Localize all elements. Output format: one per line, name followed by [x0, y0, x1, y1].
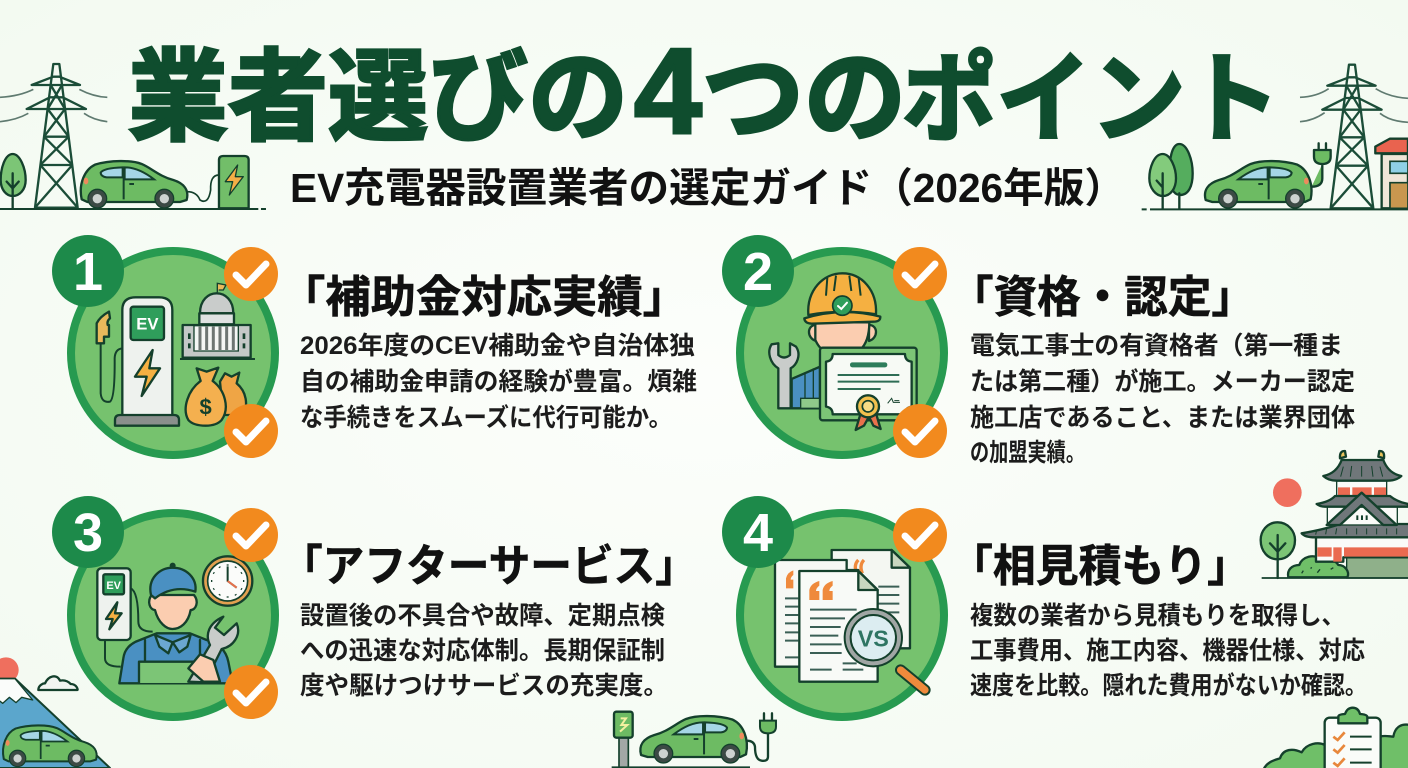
castle upper storey	[1337, 481, 1387, 496]
title: 4	[634, 23, 702, 159]
icon: car	[81, 161, 187, 208]
power lines	[1300, 89, 1408, 122]
badge check	[838, 303, 847, 309]
bush marks	[1302, 567, 1333, 573]
icon: bolt	[225, 165, 243, 195]
front quote mark	[809, 581, 833, 600]
face	[815, 322, 869, 350]
scene: top-left tower, car and charger	[0, 64, 266, 209]
certificate frame	[820, 348, 917, 420]
illustration: engineer with certificate	[769, 273, 917, 430]
magnifier lens	[851, 615, 896, 660]
power plug	[1312, 143, 1331, 187]
body text: 複数の業者から見積もりを取得し、	[970, 602, 1345, 630]
front document	[799, 571, 878, 682]
check badge	[224, 247, 278, 301]
castle upper red band	[1338, 487, 1386, 495]
castle middle roof	[1317, 496, 1408, 507]
gable windows	[1357, 515, 1367, 520]
body text: 工事費用、施工内容、機器仕様、対応	[970, 637, 1365, 665]
check badge	[893, 404, 947, 458]
body text: 電気工事士の有資格者（第一種ま	[970, 332, 1343, 360]
ground line	[1262, 575, 1408, 580]
icon: nozzle	[97, 312, 110, 343]
charger base	[115, 415, 179, 426]
castle walls	[1316, 537, 1408, 562]
check badge	[224, 508, 278, 562]
collar	[155, 635, 191, 653]
point 3	[52, 496, 697, 719]
certificate title bar	[850, 362, 887, 367]
EV screen	[131, 307, 164, 340]
ground line	[1142, 206, 1408, 212]
worker cap	[150, 568, 196, 598]
icon: bolt	[106, 602, 122, 629]
icon: power tower	[27, 64, 86, 208]
check badge	[893, 247, 947, 301]
body text: 2026年度のCEV補助金や自治体独	[300, 332, 695, 360]
charger head	[614, 712, 633, 738]
icon: wrench	[188, 617, 238, 682]
helmet badge	[833, 296, 852, 315]
seal	[857, 395, 879, 417]
scene: bottom centre car and charger	[612, 712, 776, 767]
back quote mark	[855, 560, 864, 573]
icon: wrench	[769, 343, 798, 408]
mountain snow	[0, 679, 33, 703]
EV label: EV	[106, 580, 122, 592]
signature	[888, 398, 900, 403]
power lines	[0, 89, 107, 122]
icon: house	[1375, 139, 1408, 208]
icon: bolt	[135, 350, 160, 396]
back document	[832, 550, 910, 648]
certificate lines	[838, 375, 899, 389]
seal centre	[862, 401, 874, 412]
point 4	[722, 496, 1367, 717]
overalls bib	[139, 662, 193, 683]
shirt	[792, 367, 820, 408]
number badge	[52, 496, 124, 568]
roof tile marks	[1316, 466, 1397, 535]
icon: bush	[1288, 556, 1348, 577]
heading: 「資格・認定」	[950, 273, 1255, 322]
ground line	[0, 206, 266, 212]
plug cable	[747, 713, 772, 761]
number: 2	[743, 242, 773, 302]
front document lines	[810, 610, 863, 670]
icon: small money bag	[220, 373, 246, 415]
scene: clipboard and bushes	[1263, 708, 1408, 768]
check badge	[893, 508, 947, 562]
charger cables	[105, 588, 153, 667]
body text: 速度を比較。隠れた費用がないか確認。	[970, 671, 1367, 700]
charger screen	[103, 574, 124, 594]
number: 1	[73, 242, 103, 302]
left document	[775, 560, 858, 667]
icon: sun	[1273, 478, 1302, 507]
illustration: technician, charger and clock	[97, 556, 252, 683]
title	[128, 23, 1280, 159]
illustration: EV charger, government building, money bags	[97, 283, 255, 426]
body text: 自の補助金申請の経験が豊富。煩雑	[300, 367, 697, 396]
shirt bib	[801, 368, 820, 408]
charger symbol	[620, 718, 627, 732]
castle gable	[1327, 493, 1397, 525]
heading: 「補助金対応実績」	[280, 273, 688, 322]
icon: trees	[1149, 144, 1193, 208]
icon: helmet	[808, 273, 876, 315]
charger body	[97, 568, 131, 640]
charger post	[619, 737, 628, 767]
ground line	[612, 764, 750, 768]
icon: car	[3, 725, 97, 767]
worker overalls	[139, 640, 200, 683]
icon: charging station	[219, 156, 249, 208]
body text	[970, 332, 1355, 467]
magnifier handle	[901, 670, 925, 690]
icon: large money bag	[186, 368, 226, 426]
worker face	[149, 595, 197, 629]
castle top roof	[1323, 460, 1401, 481]
icon: bushes	[1263, 725, 1408, 768]
front document fold	[858, 571, 878, 590]
number: 3	[73, 503, 103, 563]
body text: たは第二種）が施工。メーカー認定	[970, 367, 1355, 396]
circle panel	[740, 513, 944, 717]
ears	[809, 325, 876, 341]
scene: top-right tower, car and house	[1142, 65, 1408, 209]
left quote mark	[786, 570, 793, 588]
title: つの	[702, 43, 906, 155]
castle red band	[1317, 547, 1408, 562]
magnifier ring	[845, 609, 902, 666]
body text	[300, 332, 697, 432]
magnifier handle grip	[901, 670, 925, 690]
icon: mountain	[0, 679, 110, 768]
subtitle: EV充電器設置業者の選定ガイド（2026年版）	[290, 165, 1125, 211]
circle panel	[740, 251, 944, 455]
certificate paper	[826, 354, 912, 414]
check badge	[224, 665, 278, 719]
title: ポイント	[902, 44, 1280, 154]
left document lines	[785, 598, 798, 657]
body text: 施工店であること、または業界団体	[970, 404, 1355, 432]
castle middle storey	[1327, 505, 1397, 525]
number badge	[722, 235, 794, 307]
clipboard clip	[1338, 708, 1367, 723]
body text	[300, 602, 668, 700]
number: 4	[743, 503, 773, 563]
icon: sun	[0, 657, 19, 683]
EV label: EV	[136, 315, 158, 334]
heading: 「アフターサービス」	[281, 542, 697, 591]
title: 業者選びの	[128, 42, 628, 154]
circle panel	[71, 513, 275, 717]
back document fold	[892, 550, 910, 568]
icon: tree	[1261, 522, 1295, 578]
body text: 度や駆けつけサービスの充実度。	[300, 672, 668, 700]
castle lower roof	[1302, 524, 1408, 537]
charging cable	[187, 175, 219, 201]
heading: 「相見積もり」	[950, 542, 1250, 591]
icon: car	[640, 716, 747, 763]
number badge	[52, 235, 124, 307]
icon: tree	[1, 154, 26, 208]
VS label: VS	[858, 625, 889, 651]
body text: な手続きをスムーズに代行可能か。	[300, 403, 672, 432]
illustration: quotation documents and magnifier	[775, 550, 925, 690]
ribbon tails	[856, 413, 881, 430]
scene: Mount Fuji and car	[0, 657, 110, 768]
point 1	[52, 235, 697, 458]
body text: の加盟実績。	[970, 439, 1085, 467]
icon: cloud	[38, 676, 78, 690]
check lines	[1350, 737, 1372, 763]
scene: castle	[1261, 451, 1408, 578]
worker torso	[119, 633, 233, 683]
icon: clock	[203, 556, 252, 606]
cap button	[170, 563, 176, 569]
number badge	[722, 496, 794, 568]
helmet brim	[804, 312, 880, 324]
body text: への迅速な対応体制。長期保証制	[300, 637, 665, 665]
icon: car	[1205, 161, 1312, 208]
check marks	[1333, 732, 1345, 766]
back document lines	[878, 587, 899, 612]
circle panel	[71, 251, 275, 455]
body text: 設置後の不具合や故障、定期点検	[300, 602, 665, 630]
icon: government building	[180, 283, 255, 359]
icon: clipboard	[1325, 718, 1381, 768]
point 2	[722, 235, 1355, 467]
plug body	[760, 721, 776, 733]
icon: charger body	[122, 297, 172, 417]
hand	[188, 654, 220, 682]
icon: power tower	[1322, 65, 1382, 208]
nozzle and hose	[101, 343, 122, 402]
check badge	[224, 404, 278, 458]
body text	[970, 602, 1367, 700]
roof ornaments	[1340, 451, 1384, 458]
helmet ribs	[826, 276, 861, 296]
dollar sign: $	[200, 394, 212, 419]
castle base wall	[1347, 557, 1408, 578]
